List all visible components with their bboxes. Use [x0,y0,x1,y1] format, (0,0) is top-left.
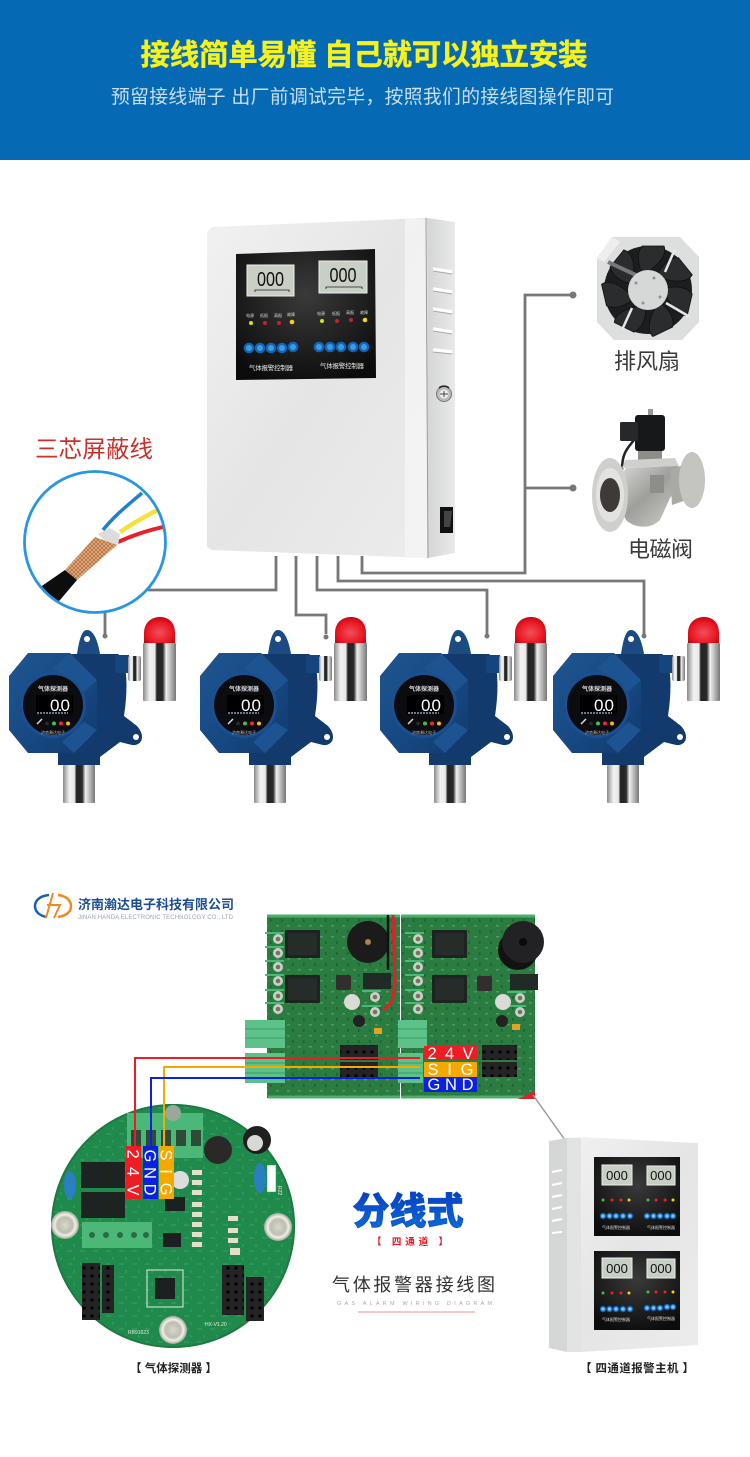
control panel [236,249,376,380]
channel control boards [245,915,544,1099]
control panel: 低报 [260,312,268,318]
diagram heading: 气体报警器接线图 [332,1275,495,1295]
diagram heading: GAS ALARM WIRING DIAGRAM [337,1301,492,1307]
host panel top [594,1157,680,1236]
alarm host cabinet [549,1137,698,1352]
caption: gas detector: 【 气体探测器 】 [130,1361,217,1375]
gas detector 1: 气体探测器 [38,685,68,693]
control panel: 电源 [246,312,254,318]
gas detector 1: 0.0 [50,696,70,715]
connector line to alarm host [533,1095,565,1140]
gas detector 1 [9,617,176,803]
detector terminal labels: S I G [156,1150,174,1196]
host panel top: 000 [650,1168,672,1183]
host panel bottom: 气体报警控制器 [647,1315,675,1321]
caption: four channel host: 【 四通道报警主机 】 [580,1361,694,1375]
control panel: 气体报警控制器 [320,361,364,370]
label: solenoid valve: 电磁阀 [628,537,693,562]
control panel: 000 [257,269,284,291]
subtitle: 预留接线端子 出厂前调试完毕，按照我们的接线图操作即可 [111,86,614,107]
gas detector 4: 济南瀚达电子 [585,729,609,735]
detector terminal labels [124,1146,174,1199]
board terminal labels [424,1045,477,1094]
gas detector 2: 气体探测器 [229,685,259,693]
board terminal labels: S I G [428,1061,474,1079]
gas detector 4: 0.0 [594,696,614,715]
gas detector 3: 济南瀚达电子 [412,729,436,735]
control panel: 高报 [346,309,354,315]
control panel: 故障 [287,311,295,317]
control panel: 气体报警控制器 [249,363,294,372]
diagram heading [332,1191,495,1313]
wiring lines [102,292,646,640]
host panel bottom [594,1251,680,1330]
signal wires [135,1058,420,1146]
title: 接线简单易懂 自己就可以独立安装 [140,39,588,72]
label: exhaust fan: 排风扇 [614,349,680,374]
gas detector 4: 气体探测器 [582,685,612,693]
gas detector 2 [200,617,367,803]
company logo [35,893,234,921]
gas detector 2: 济南瀚达电子 [232,729,256,735]
company name: 济南瀚达电子科技有限公司 [78,897,234,912]
gas detector 3 [380,617,547,803]
round detector circuit board: R22 [276,1186,282,1195]
detector terminal labels: 2 4 V [124,1150,142,1196]
header banner [0,0,750,160]
control panel: 000 [330,265,356,287]
gas detector 3: 0.0 [421,696,441,715]
key lock [436,386,452,402]
alarm controller cabinet [207,218,455,558]
host panel top: 气体报警控制器 [602,1224,630,1230]
board terminal labels: G N D [428,1076,474,1094]
icon: exhaust fan [597,237,699,340]
control panel: 低报 [332,310,340,316]
host panel top: 气体报警控制器 [647,1224,675,1230]
control panel: 故障 [360,309,368,315]
shielded cable callout circle [24,472,168,618]
company english name: JINAN HANDA ELECTRONIC TECHNOLOGY CO., LTD [78,915,234,921]
board terminal labels: 2 4 V [428,1045,474,1063]
host panel bottom: 气体报警控制器 [602,1316,630,1322]
host panel bottom: 000 [606,1261,628,1276]
control panel: 高报 [274,312,282,318]
control panel: 电源 [317,310,325,316]
gas detector 3: 气体探测器 [409,685,439,693]
label: three-core shielded cable: 三芯屏蔽线 [35,436,153,462]
gas detector 2: 0.0 [241,696,261,715]
round detector circuit board: RB91623 [128,1330,149,1336]
icon: solenoid valve [592,409,705,532]
host panel bottom: 000 [650,1261,672,1276]
gas detector 4 [553,617,720,803]
round detector circuit board: HX-V1.20 [205,1322,227,1328]
detector terminal labels: G N D [140,1150,158,1196]
round detector circuit board [51,1104,295,1348]
diagram heading: 【 四通道 】 [372,1236,448,1248]
power switch [440,507,453,533]
gas detector 1: 济南瀚达电子 [41,729,65,735]
diagram heading: 分线式 [352,1191,464,1232]
host panel top: 000 [606,1168,628,1183]
